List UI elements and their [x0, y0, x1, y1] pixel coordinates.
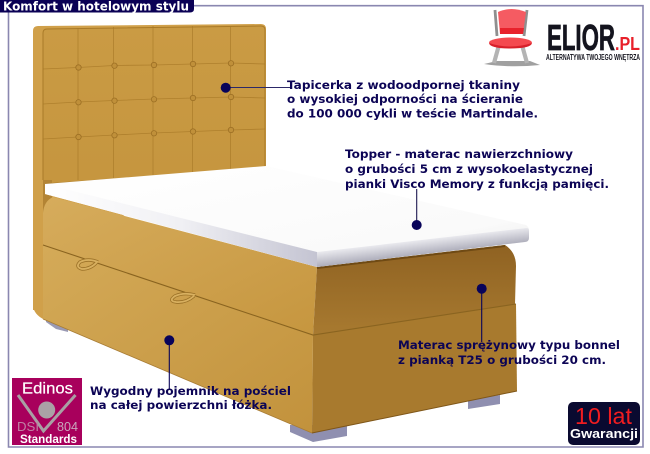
badge: Edinos DSI 804 Standards [12, 378, 82, 446]
base: storage box and mattress [33, 180, 517, 433]
callout: spring mattress [398, 284, 620, 367]
headboard [33, 24, 266, 319]
callout: topper: o grubości 5 cm z wysokoelastycznej [345, 162, 593, 176]
storage handles [78, 260, 195, 302]
badge: 10 years warranty: 10 lat [575, 403, 632, 429]
callout: spring mattress: z pianką T25 o grubości 20 cm. [398, 353, 606, 367]
topper [45, 166, 529, 267]
logo: Elior.pl: .PL [615, 34, 640, 54]
right leg [468, 395, 500, 409]
badge: Edinos DSI 804 Standards: DSI [17, 420, 39, 434]
badge: Edinos DSI 804 Standards: Edinos [22, 380, 73, 398]
front leg [290, 425, 347, 442]
back leg [46, 318, 68, 332]
callout: upholstery: do 100 000 cykli w teście Martindale. [287, 106, 538, 120]
callout: storage container: Wygodny pojemnik na pościel [90, 384, 291, 398]
callout: topper: pianki Visco Memory z funkcją pamięci. [345, 177, 609, 191]
callout: spring mattress: Materac sprężynowy typu bonnel [398, 338, 620, 352]
callout: storage container: na całej powierzchni łóżka. [90, 398, 272, 412]
logo: Elior.pl [484, 9, 640, 66]
bed illustration [33, 24, 529, 442]
icon: chair [484, 9, 540, 66]
badge: Edinos DSI 804 Standards: Standards [20, 434, 77, 446]
callout: storage container [90, 335, 291, 412]
callout: topper: Topper - materac nawierzchniowy [345, 147, 574, 161]
badge: Edinos DSI 804 Standards: 804 [57, 420, 78, 434]
callout: upholstery: o wysokiej odporności na ścieranie [287, 92, 523, 106]
badge: 10 years warranty [568, 402, 640, 445]
callout: upholstery [221, 78, 538, 120]
callout: topper [345, 147, 609, 230]
badge: 10 years warranty: Gwarancji [570, 426, 638, 441]
callout: upholstery: Tapicerka z wodoodpornej tkaniny [287, 78, 521, 92]
